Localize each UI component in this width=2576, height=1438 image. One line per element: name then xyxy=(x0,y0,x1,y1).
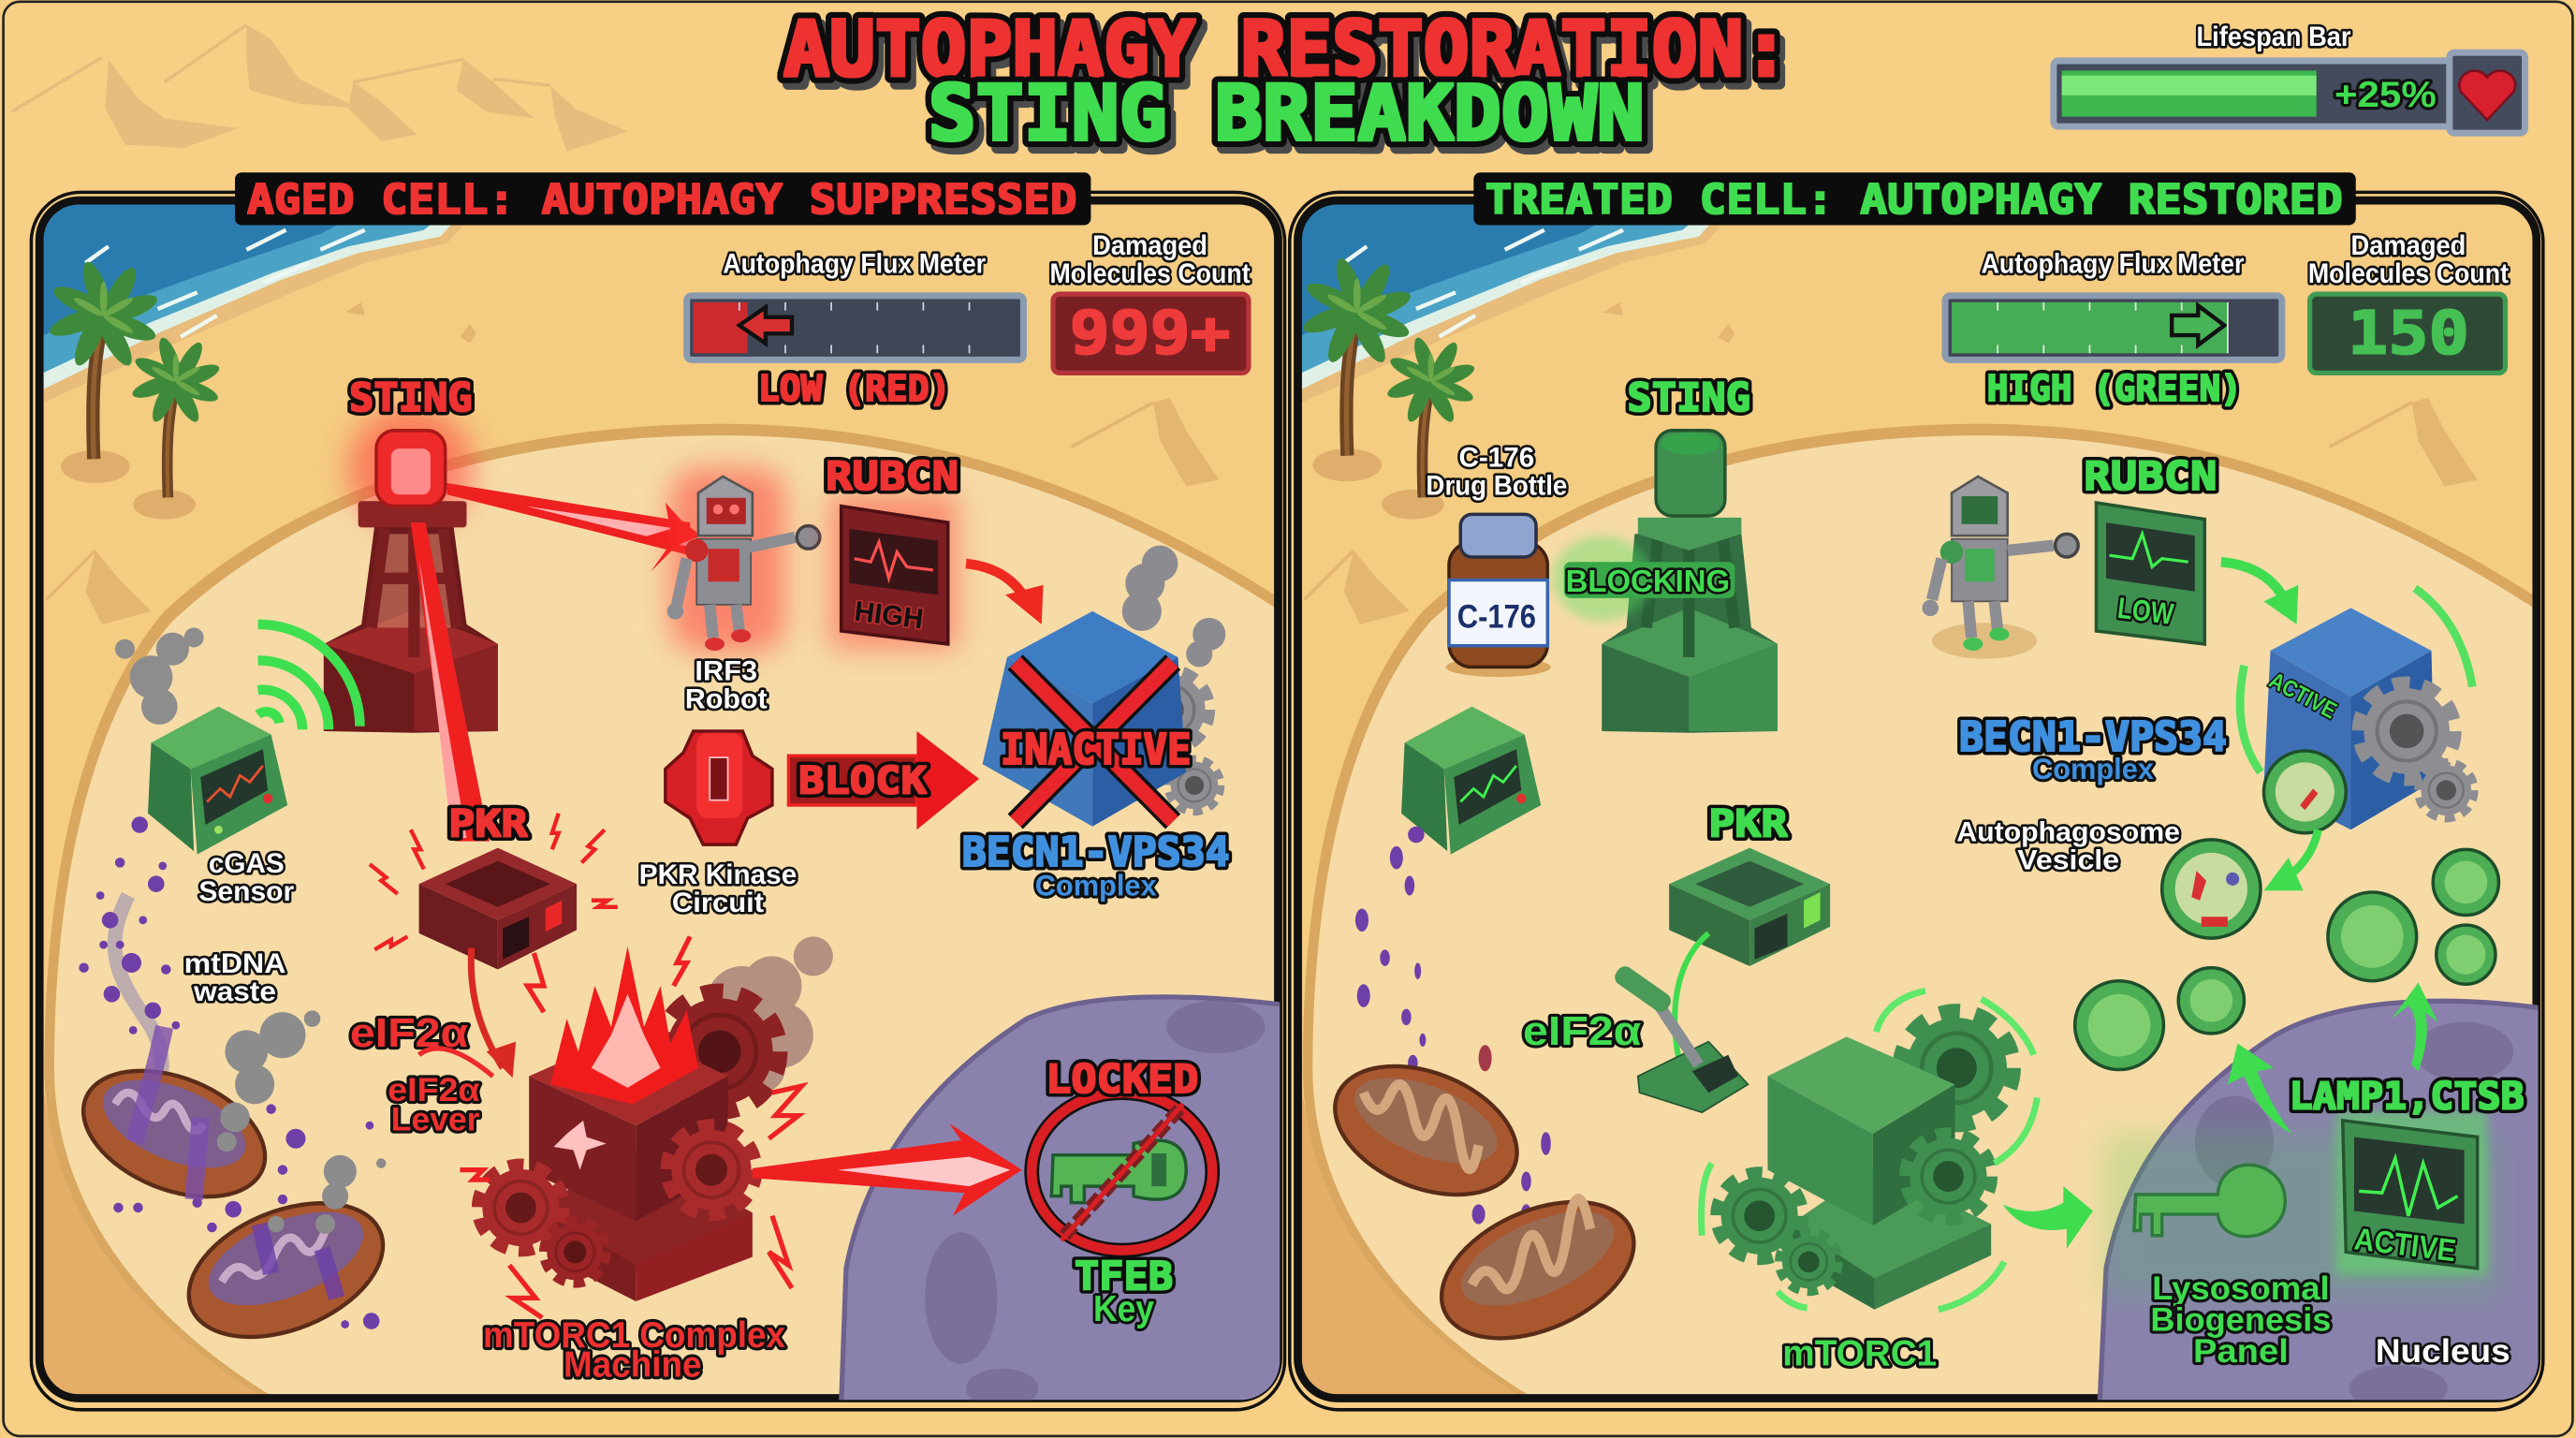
eIF2a lever label: Lever xyxy=(391,1101,480,1137)
BECN1-VPS34 complex inactive: BECN1-VPS34 xyxy=(962,829,1230,876)
arrow: block: BLOCK xyxy=(798,759,928,803)
icon: heart xyxy=(2459,71,2515,120)
TFEB key locked: Key xyxy=(1093,1289,1154,1329)
palm trees xyxy=(47,258,222,520)
heading: aged cell banner: AGED CELL: AUTOPHAGY SUPPRESSED xyxy=(247,176,1076,224)
lifespan bar: Lifespan Bar xyxy=(2197,22,2351,52)
mTORC1 restored: mTORC1 xyxy=(1782,1333,1937,1373)
arrow: vesicle to vesicle xyxy=(2263,829,2318,890)
arrows: lysosome outputs xyxy=(2228,983,2438,1134)
TFEB key locked: TFEB xyxy=(1075,1254,1173,1299)
lifespan bar: +25% xyxy=(2334,75,2437,115)
autophagy flux meter low: LOW (RED) xyxy=(758,368,950,410)
blocking label xyxy=(1553,536,1734,621)
RUBCN panel high xyxy=(826,453,959,649)
IRF3 robot calm xyxy=(1922,477,2078,659)
heading: treated cell banner: TREATED CELL: AUTOPHAGY RESTORED xyxy=(1486,176,2343,224)
BECN1-VPS34 complex active xyxy=(1959,588,2474,829)
IRF3 robot: Robot xyxy=(685,683,768,714)
TFEB key locked: LOCKED xyxy=(1046,1056,1198,1102)
damaged molecules count 999: Molecules Count xyxy=(1050,258,1251,289)
BECN1-VPS34 complex active: ACTIVE xyxy=(2265,668,2340,725)
arrow: RUBCN to complex xyxy=(966,564,1044,624)
autophagosome vesicles xyxy=(1956,751,2498,1070)
desert dunes xyxy=(11,24,627,151)
healthy mitochondrion 2 xyxy=(1421,1175,1655,1366)
C-176 drug bottle: Drug Bottle xyxy=(1426,470,1567,501)
title xyxy=(783,7,1789,158)
autophagy flux meter high: HIGH (GREEN) xyxy=(1987,368,2242,410)
RUBCN panel low: RUBCN xyxy=(2084,453,2217,499)
C-176 drug bottle: C-176 xyxy=(1457,598,1536,635)
PKR kinase circuit: PKR Kinase xyxy=(639,859,797,890)
RUBCN panel low: LOW xyxy=(2115,591,2175,631)
beam to TFEB xyxy=(753,1123,1022,1216)
cleared mtDNA particles xyxy=(1355,846,1551,1224)
PKR machine xyxy=(370,801,618,969)
eIF2a lever label: eIF2α xyxy=(388,1072,480,1108)
autophagy flux meter high xyxy=(1945,248,2282,410)
autophagosome vesicles: Autophagosome xyxy=(1956,817,2180,848)
mtDNA waste particles: mtDNA xyxy=(184,948,285,979)
cGAS sensor restored xyxy=(1401,707,1541,855)
cGAS sensor: cGAS xyxy=(209,848,285,879)
arrow: block xyxy=(788,731,979,829)
STING tower active xyxy=(324,374,498,733)
mTORC1 complex machine xyxy=(460,936,833,1386)
PKR kinase circuit: Circuit xyxy=(672,888,764,918)
lysosomal biogenesis panel: Biogenesis xyxy=(2150,1302,2331,1339)
lysosomal biogenesis panel: Panel xyxy=(2193,1333,2289,1370)
arrow: mTORC1 to nucleus xyxy=(2002,1186,2093,1249)
damaged molecules count 999 xyxy=(1050,230,1251,373)
lysosomal biogenesis panel: LAMP1,CTSB xyxy=(2290,1075,2525,1119)
TFEB key locked xyxy=(1032,1056,1212,1329)
PKR machine: PKR xyxy=(448,801,528,845)
lysosomal biogenesis panel: Lysosomal xyxy=(2152,1270,2330,1307)
blocking label: BLOCKING xyxy=(1566,565,1730,599)
lysosomal biogenesis panel: ACTIVE xyxy=(2352,1222,2458,1269)
damaged molecules count 150 xyxy=(2308,230,2509,373)
BECN1-VPS34 complex active: Complex xyxy=(2032,752,2154,785)
PKR kinase circuit xyxy=(639,731,797,918)
RUBCN panel high: HIGH xyxy=(853,596,925,635)
mTORC1 complex machine: mTORC1 Complex xyxy=(483,1315,785,1356)
eIF2a lever xyxy=(1523,933,1748,1112)
PKR machine calm xyxy=(1669,801,1830,966)
autophagosome vesicles: Vesicle xyxy=(2017,844,2119,875)
BECN1-VPS34 complex inactive: INACTIVE xyxy=(1001,725,1191,774)
mTORC1 restored xyxy=(1702,990,2037,1373)
IRF3 robot: IRF3 xyxy=(695,656,757,687)
title: STING BREAKDOWN xyxy=(929,70,1645,158)
healthy mitochondrion 1 xyxy=(1316,1041,1536,1220)
damaged molecules count 150: 150 xyxy=(2348,298,2469,367)
mTORC1 complex machine: Machine xyxy=(564,1345,701,1386)
TFEB key unlocked xyxy=(2134,1165,2285,1237)
IRF3 robot xyxy=(667,468,820,714)
damaged molecules count 999: 999+ xyxy=(1070,298,1231,367)
nucleus right xyxy=(2100,1001,2546,1412)
STING tower blocked: STING xyxy=(1627,374,1750,420)
RUBCN panel low xyxy=(2084,453,2217,644)
nucleus left xyxy=(842,997,1290,1408)
damaged mitochondrion 2 xyxy=(169,1155,402,1363)
title: AUTOPHAGY RESTORATION: xyxy=(783,7,1789,95)
eIF2a lever label xyxy=(350,1010,493,1137)
STING tower active: STING xyxy=(349,374,473,420)
red beams from STING xyxy=(411,483,701,842)
damaged mitochondrion 1 xyxy=(65,1010,320,1221)
panel: treated cell xyxy=(1290,172,2572,1412)
STING tower blocked xyxy=(1553,374,1778,733)
arrow: PKR to eIF2a xyxy=(471,948,516,1078)
damaged molecules count 999: Damaged xyxy=(1092,230,1208,261)
BECN1-VPS34 complex active: BECN1-VPS34 xyxy=(1959,713,2227,761)
RUBCN panel high: RUBCN xyxy=(826,453,959,499)
BECN1-VPS34 complex inactive: Complex xyxy=(1035,868,1157,902)
eIF2a lever: eIF2α xyxy=(1523,1008,1641,1054)
damaged molecules count 150: Damaged xyxy=(2351,230,2466,261)
C-176 drug bottle xyxy=(1426,442,1567,677)
BECN1-VPS34 complex inactive xyxy=(962,546,1230,902)
palm trees xyxy=(1300,256,1477,520)
wifi signal arcs xyxy=(258,624,359,729)
autophagy flux meter low: Autophagy Flux Meter xyxy=(723,248,986,279)
mtDNA waste particles xyxy=(79,816,379,1329)
lysosomal biogenesis panel xyxy=(2150,1075,2525,1370)
arrow: RUBCN to complex xyxy=(2221,562,2298,624)
autophagy flux meter high: Autophagy Flux Meter xyxy=(1982,248,2245,279)
mtDNA waste particles: waste xyxy=(193,976,276,1007)
cGAS sensor: Sensor xyxy=(198,876,295,907)
autophagy flux meter low xyxy=(687,248,1023,410)
panel: aged cell xyxy=(31,172,1314,1410)
lifespan bar xyxy=(2054,22,2525,133)
C-176 drug bottle: C-176 xyxy=(1459,442,1534,473)
eIF2a lever label: eIF2α xyxy=(350,1010,468,1056)
cGAS sensor xyxy=(115,627,295,907)
nucleus right: Nucleus xyxy=(2376,1333,2510,1370)
damaged molecules count 150: Molecules Count xyxy=(2308,258,2509,289)
PKR machine calm: PKR xyxy=(1708,801,1788,845)
